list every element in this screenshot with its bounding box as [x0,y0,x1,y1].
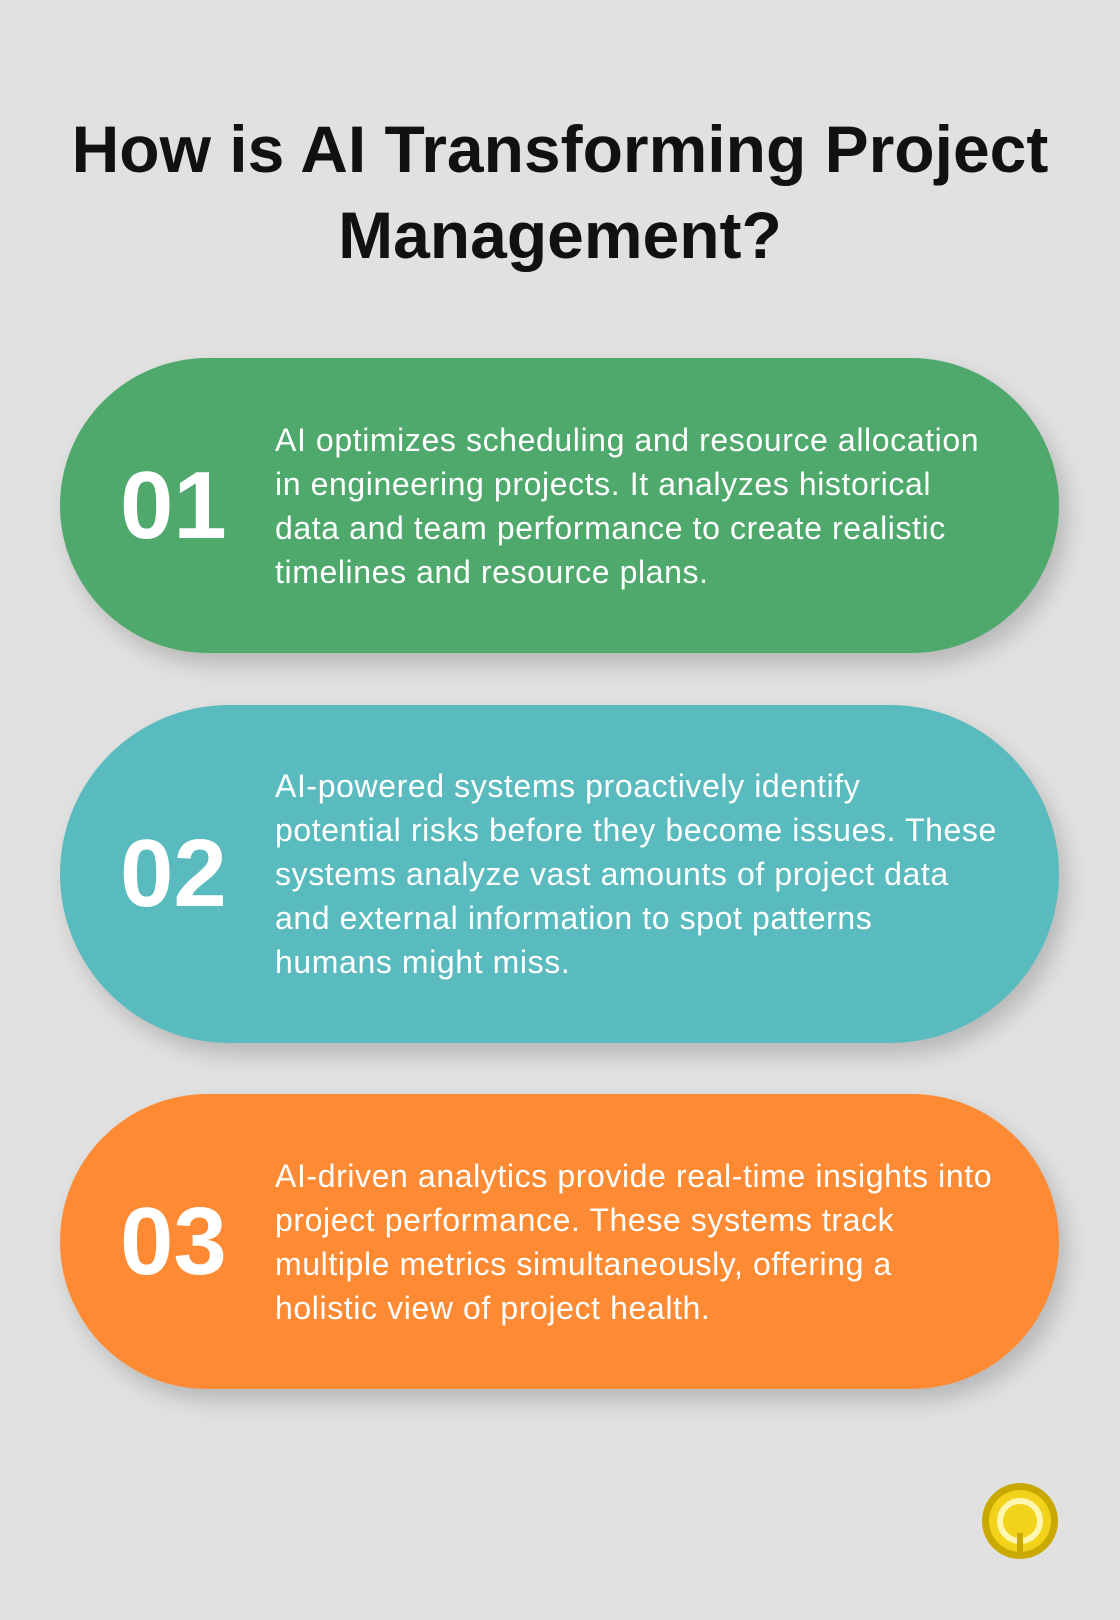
icon: logo [982,1483,1058,1559]
panel: 02 risks [60,705,1059,1043]
text 03: project performance. These systems track [275,1202,894,1238]
text 02: AI-powered systems proactively identify [275,768,860,804]
title: Management? [338,198,782,272]
text 03 [275,1158,992,1326]
text 01: AI optimizes scheduling and resource allocation [275,422,979,458]
number 01: 01 [120,452,227,558]
text 02: and external information to spot patterns [275,900,872,936]
panel: 01 scheduling [60,358,1059,653]
text 02: systems analyze vast amounts of project data [275,856,949,892]
text 01 [275,422,979,590]
title: How is AI Transforming Project [72,112,1048,186]
text 03: multiple metrics simultaneously, offering a [275,1246,892,1282]
text 02: humans might miss. [275,944,570,980]
panel: 03 analytics [60,1094,1059,1389]
text 03: AI-driven analytics provide real-time insights into [275,1158,992,1194]
text 01: in engineering projects. It analyzes historical [275,466,931,502]
text 02 [275,768,997,980]
number 02: 02 [120,820,227,927]
text 03: holistic view of project health. [275,1290,710,1326]
text 02: potential risks before they become issues. These [275,812,997,848]
text 01: timelines and resource plans. [275,554,709,590]
text 01: data and team performance to create realistic [275,510,946,546]
number 03: 03 [120,1188,227,1294]
title [72,112,1048,272]
